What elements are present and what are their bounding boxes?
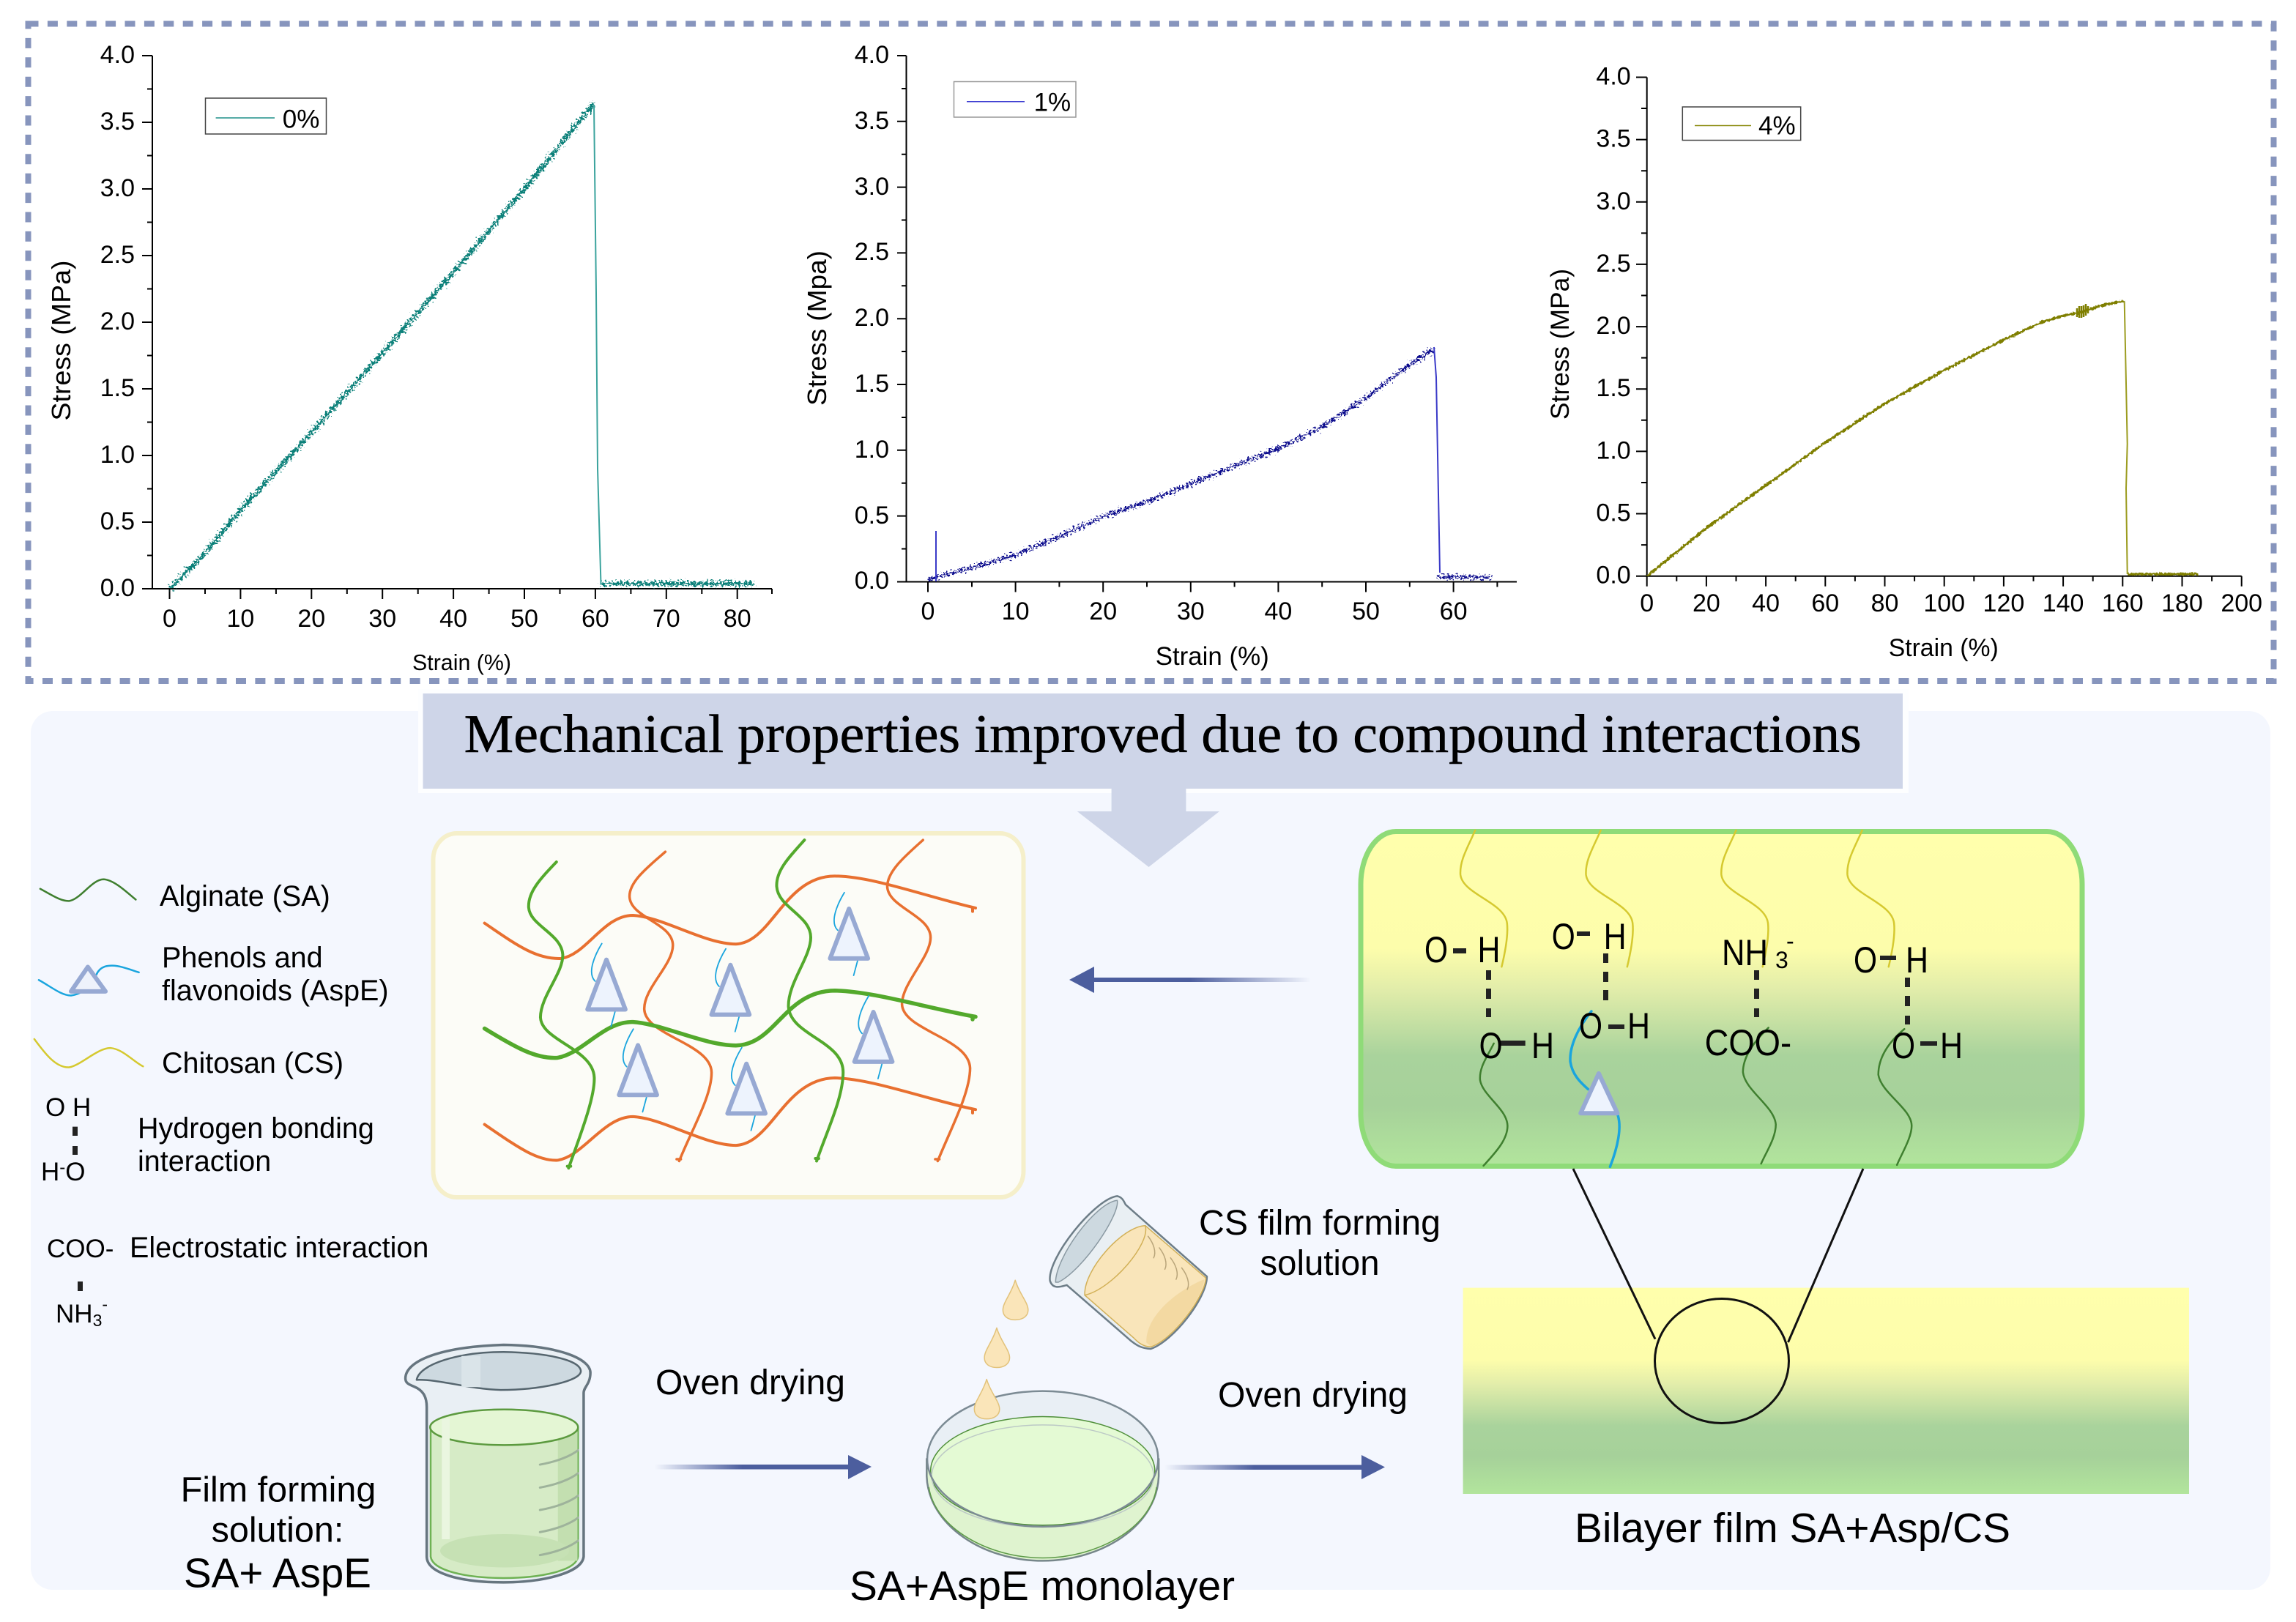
chart: stress-strain 4%: 3.5	[1596, 125, 1631, 153]
chart: stress-strain 1%: 2.0	[855, 304, 889, 332]
legend icon: hydrogen bond: H	[41, 1158, 59, 1186]
label: CS film forming solution	[1199, 1204, 1441, 1283]
chart: stress-strain 0%: 0.5	[100, 507, 135, 535]
molecule labels: H	[1627, 1005, 1650, 1046]
chart: stress-strain 4%: 2.5	[1596, 250, 1631, 278]
legend icon: hydrogen bond: O	[65, 1158, 86, 1186]
chart: stress-strain 4%: 0.5	[1596, 499, 1631, 527]
chart: stress-strain 1%: 0	[921, 598, 935, 625]
legend icon: hydrogen bond	[41, 1093, 91, 1186]
legend	[34, 879, 428, 1330]
chart: stress-strain 0%: 1.5	[100, 374, 135, 402]
chart: stress-strain 0%: 80	[724, 605, 751, 633]
label: bilayer film: Bilayer film SA+Asp/CS	[1575, 1505, 2010, 1552]
chart: stress-strain 4%: 180	[2161, 589, 2203, 617]
label: film forming solution: solution:	[212, 1511, 343, 1550]
molecule labels: 3	[1775, 947, 1788, 973]
chart: stress-strain 1%: 10	[1002, 598, 1030, 625]
legend labels: Hydrogen bonding	[138, 1112, 374, 1145]
zoom callout lines and circle	[1573, 1169, 1863, 1424]
chart: stress-strain 1%: 60	[1440, 598, 1468, 625]
chart: stress-strain 1%	[802, 41, 1517, 671]
chart: stress-strain 1%: 3.5	[855, 107, 889, 135]
triangles: phenols and flavonoids	[587, 893, 892, 1131]
chains: chitosan, alginate and phenol	[1460, 830, 1912, 1167]
legend labels	[130, 880, 428, 1264]
legend labels: Alginate (SA)	[160, 880, 330, 912]
icon: green beaker	[406, 1344, 590, 1582]
arrow: dish to bilayer film	[1164, 1455, 1385, 1479]
bonds: hydrogen and electrostatic	[1453, 931, 1937, 1046]
molecule labels: O	[1552, 916, 1575, 957]
chart: stress-strain 0%: 20	[297, 605, 325, 633]
chart: stress-strain 0%: 3.0	[100, 174, 135, 202]
chart: stress-strain 4%: 60	[1811, 589, 1839, 617]
chart: stress-strain 0%: 50	[510, 605, 538, 633]
legend icon: alginate	[40, 879, 135, 901]
panel: bilayer film mechanism background	[31, 711, 2270, 1590]
chart: stress-strain 1%: 40	[1264, 598, 1292, 625]
chart: stress-strain 4%: 40	[1752, 589, 1780, 617]
molecule labels: O	[1424, 929, 1448, 970]
legend icon: chitosan	[34, 1039, 143, 1068]
chart: stress-strain 0%: Stress (MPa)	[46, 261, 76, 420]
chart: stress-strain 4%: 140	[2043, 589, 2084, 617]
molecule labels: O	[1479, 1025, 1503, 1066]
molecule labels: -	[1786, 928, 1794, 954]
label: SA+AspE monolayer: SA+AspE monolayer	[850, 1563, 1235, 1610]
chart: stress-strain 0%: 70	[653, 605, 680, 633]
chart: stress-strain 0%: 0%	[283, 105, 319, 133]
chart: stress-strain 4%: Strain (%)	[1889, 634, 1999, 662]
chart: stress-strain 4%: 200	[2221, 589, 2262, 617]
label: film forming solution: SA+ AspE	[184, 1550, 371, 1596]
chart: stress-strain 1%: 1%	[1034, 88, 1071, 117]
legend icon: electrostatic bond: 3	[93, 1311, 102, 1330]
molecule labels	[1424, 916, 1963, 1066]
chart: stress-strain 4%: 120	[1983, 589, 2024, 617]
chart: stress-strain 4%: 160	[2102, 589, 2144, 617]
chart: stress-strain 4%: 0.0	[1596, 562, 1631, 589]
legend labels: Chitosan (CS)	[162, 1047, 343, 1079]
molecule labels: COO-	[1705, 1022, 1791, 1063]
chart: stress-strain 0%: 30	[368, 605, 396, 633]
chart: stress-strain 0%: 40	[439, 605, 467, 633]
chart: stress-strain 4%: 1.0	[1596, 436, 1631, 464]
bilayer film block	[1463, 1288, 2189, 1494]
molecule labels: H	[1604, 916, 1627, 957]
panel: polymer network	[434, 833, 1024, 1197]
chart: stress-strain 0%: 0	[163, 605, 177, 633]
legend icon: electrostatic bond	[47, 1235, 114, 1330]
legend labels: Phenols and	[162, 942, 323, 974]
chart: stress-strain 4%: 4%	[1758, 112, 1796, 141]
title banner	[418, 689, 1909, 793]
icon: petri dish	[926, 1391, 1159, 1560]
chart: stress-strain 1%: 50	[1352, 598, 1380, 625]
molecule labels: O	[1892, 1025, 1915, 1066]
chart: stress-strain 1%: 0.0	[855, 567, 889, 595]
chart: stress-strain 0%: 2.0	[100, 308, 135, 335]
chart: stress-strain 4%: 80	[1871, 589, 1898, 617]
chart: stress-strain 1%: 2.5	[855, 238, 889, 266]
chart: stress-strain 0%	[46, 41, 772, 675]
molecule labels: H	[1940, 1025, 1963, 1066]
chart: stress-strain 1%: 1.5	[855, 370, 889, 398]
chart: stress-strain 1%: 3.0	[855, 173, 889, 201]
arrow: banner down arrow	[1077, 789, 1219, 867]
chart: stress-strain 0%: Strain (%)	[412, 650, 511, 675]
chart: stress-strain 0%: 1.0	[100, 441, 135, 469]
chart: stress-strain 4%: 1.5	[1596, 374, 1631, 402]
arrow: beaker to dish	[655, 1455, 872, 1479]
chart: stress-strain 0%: 0.0	[100, 574, 135, 602]
label: oven drying 1: Oven drying	[655, 1364, 845, 1402]
chart: stress-strain 4%: Stress (MPa)	[1546, 269, 1575, 420]
chains: orange and green network	[485, 840, 976, 1168]
molecule labels: H	[1478, 929, 1500, 970]
chart: stress-strain 1%: 1.0	[855, 436, 889, 464]
legend icon: electrostatic bond: NH	[56, 1300, 93, 1328]
label: oven drying 2: Oven drying	[1218, 1376, 1408, 1415]
molecule labels: H	[1906, 940, 1928, 981]
chart: stress-strain 0%: 60	[582, 605, 609, 633]
arrow: from interface to network	[1069, 967, 1311, 993]
legend icon: hydrogen bond: O H	[45, 1093, 91, 1122]
chart: stress-strain 1%: Strain (%)	[1156, 642, 1269, 671]
icon: pouring beaker and drops	[974, 1196, 1207, 1419]
legend labels: Electrostatic interaction	[130, 1232, 428, 1264]
chart: stress-strain 0%: 3.5	[100, 108, 135, 135]
chart: stress-strain 1%: 0.5	[855, 502, 889, 529]
molecule labels: O	[1579, 1005, 1602, 1046]
molecule labels: O	[1854, 940, 1877, 981]
chart: stress-strain 0%: 2.5	[100, 241, 135, 269]
chart: stress-strain 1%: 20	[1089, 598, 1117, 625]
label: CS film forming solution: CS film forming	[1199, 1204, 1441, 1243]
chart: stress-strain 4%: 100	[1923, 589, 1965, 617]
chart: stress-strain 4%: 20	[1693, 589, 1720, 617]
molecule labels: NH	[1722, 932, 1768, 973]
panel: stress-strain charts frame	[28, 23, 2273, 681]
chart: stress-strain 1%: 30	[1177, 598, 1205, 625]
panel: interface zoom view	[1361, 830, 2082, 1167]
chart: stress-strain 1%: Stress (Mpa)	[802, 250, 832, 406]
legend labels: interaction	[138, 1145, 271, 1178]
label: film forming solution: Film forming	[181, 1470, 376, 1510]
legend labels: flavonoids (AspE)	[162, 975, 389, 1007]
molecule labels: H	[1531, 1025, 1554, 1066]
chart: stress-strain 4%: 3.0	[1596, 187, 1631, 215]
chart: stress-strain 1%: 4.0	[855, 41, 889, 69]
label: CS film forming solution: solution	[1260, 1244, 1380, 1283]
label: film forming solution	[181, 1470, 376, 1596]
legend icon: electrostatic bond: COO-	[47, 1235, 114, 1263]
chart: stress-strain 0%: 4.0	[100, 41, 135, 69]
legend icon: hydrogen bond: -	[59, 1158, 65, 1178]
chart: stress-strain 0%: 10	[226, 605, 254, 633]
legend icon: phenols	[39, 966, 139, 996]
chart: stress-strain 4%: 0	[1640, 589, 1654, 617]
chart: stress-strain 4%: 2.0	[1596, 312, 1631, 340]
title banner: Mechanical properties improved due to compound interactions	[464, 704, 1862, 765]
chart: stress-strain 4%	[1546, 63, 2262, 662]
legend icon: electrostatic bond: -	[102, 1295, 108, 1314]
chart: stress-strain 4%: 4.0	[1596, 63, 1631, 91]
